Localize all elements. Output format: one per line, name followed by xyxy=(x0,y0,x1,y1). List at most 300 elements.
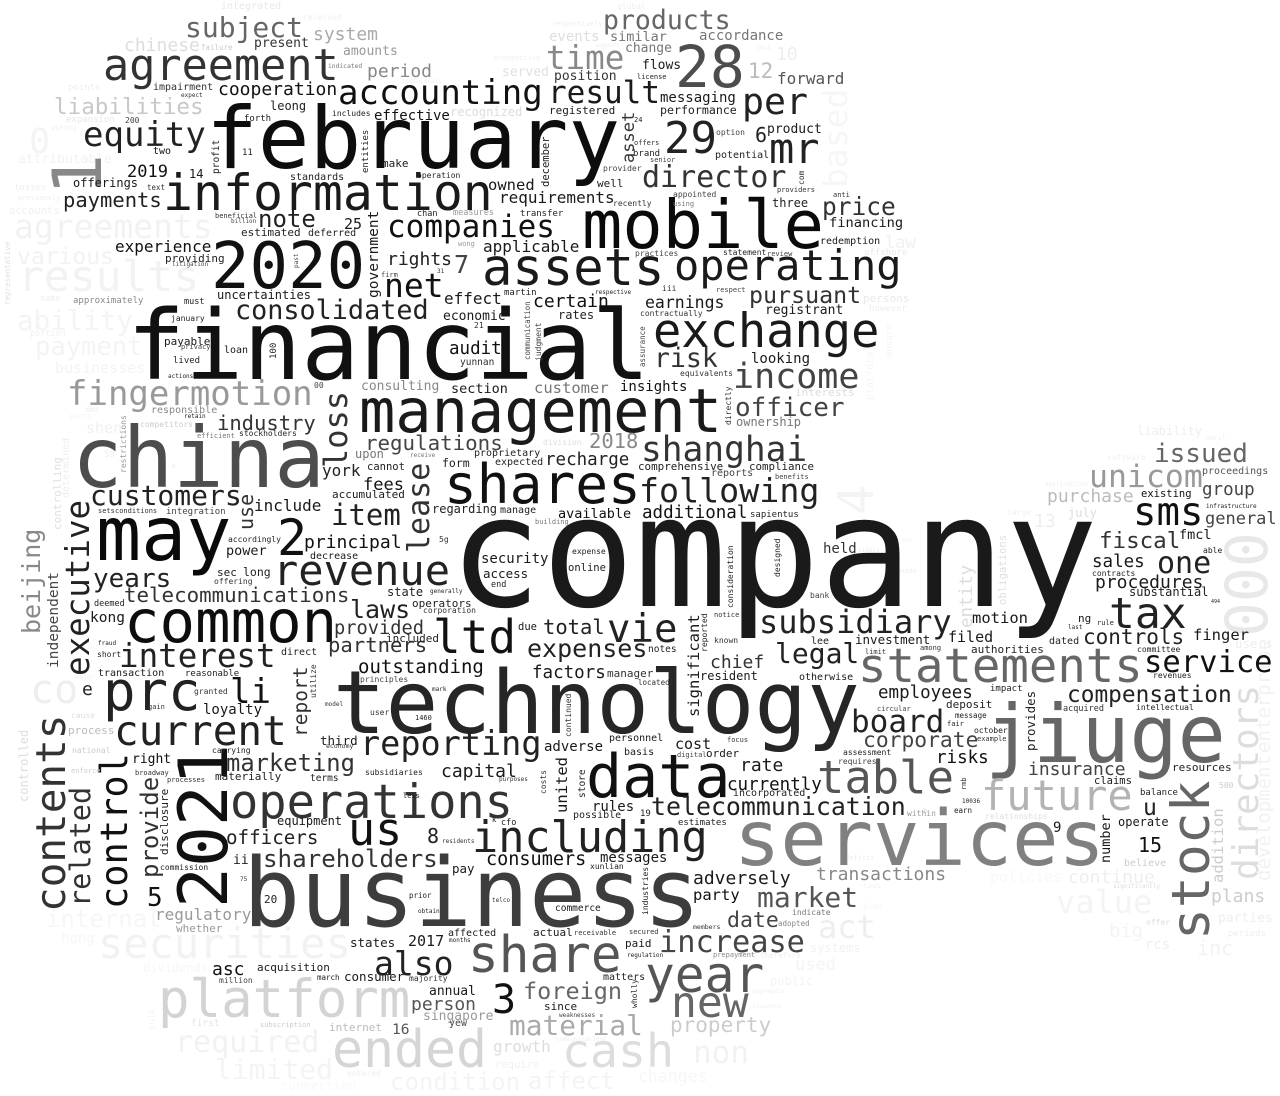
medium words: sms xyxy=(1133,490,1203,535)
vertical words: profit xyxy=(211,140,222,174)
medium words: chief xyxy=(710,652,764,673)
small words: million xyxy=(219,976,253,985)
small words: reasonable xyxy=(185,669,239,679)
faint vertical words: controlled xyxy=(17,730,31,802)
small words: operation xyxy=(417,171,461,180)
small words: purchase xyxy=(1047,486,1134,507)
small words: operate xyxy=(1118,815,1169,829)
small words: located xyxy=(638,678,670,687)
small words: upon xyxy=(355,447,384,461)
word: may: may xyxy=(96,490,231,578)
faint background words: recognized xyxy=(450,105,522,119)
small words: estimated xyxy=(241,226,301,239)
vertical words: consideration xyxy=(726,545,735,608)
faint background words: public xyxy=(770,974,813,988)
faint background words: policies xyxy=(990,868,1062,886)
small words: message xyxy=(955,711,987,720)
small words: 00 xyxy=(314,381,324,390)
small words: 200 xyxy=(125,116,140,125)
small words: transaction xyxy=(98,668,164,679)
small words: singapore xyxy=(423,1009,494,1024)
word: statements: statements xyxy=(858,639,1143,694)
small words: equivalents xyxy=(680,369,733,378)
small words: terms xyxy=(310,773,339,784)
small words: motion xyxy=(972,609,1028,627)
small words: respect xyxy=(716,286,746,294)
medium words: 29 xyxy=(664,113,717,164)
small words: fair xyxy=(947,720,964,728)
small words: present xyxy=(254,36,309,51)
faint background words: dividends xyxy=(143,961,208,975)
word: jiuge: jiuge xyxy=(985,688,1226,781)
small words: long xyxy=(243,565,271,579)
small words: redemption xyxy=(820,236,880,247)
faint background words: events xyxy=(549,29,600,45)
word: including: including xyxy=(472,813,708,863)
medium words: officer xyxy=(735,393,845,423)
medium words: u xyxy=(1143,795,1157,821)
small words: third xyxy=(320,733,358,748)
small words: group xyxy=(1202,480,1255,500)
small words: january xyxy=(171,314,205,323)
small words: efficient xyxy=(197,432,235,440)
small words: 500 xyxy=(1219,781,1234,790)
medium words: time xyxy=(546,39,624,77)
small words: yew xyxy=(449,1018,468,1029)
small words: pay xyxy=(452,861,475,876)
small words: requires xyxy=(838,757,877,766)
small words: indicate xyxy=(792,908,831,917)
word: contents: contents xyxy=(27,715,75,912)
medium words: corporate xyxy=(863,728,978,753)
small words: gain xyxy=(148,703,165,711)
small words: factors xyxy=(532,663,606,683)
small words: asc xyxy=(212,959,245,980)
faint background words: chinese xyxy=(124,35,200,56)
vertical words: 100 xyxy=(269,343,279,359)
faint background words: 10 xyxy=(776,44,798,65)
word: data: data xyxy=(586,742,730,812)
small words: insights xyxy=(620,379,687,395)
medium words: fiscal xyxy=(1099,528,1180,554)
small words: national xyxy=(72,746,111,755)
small words: benefits xyxy=(775,473,809,481)
small words: lee xyxy=(811,636,829,647)
faint vertical words: controlling xyxy=(51,457,64,530)
small words: adverse xyxy=(544,739,603,755)
small words: compliance xyxy=(749,460,814,473)
word: company: company xyxy=(449,464,1098,643)
medium words: new xyxy=(671,978,749,1028)
small words: 24 xyxy=(634,116,642,124)
small words: well xyxy=(597,177,624,190)
small words: fmcl xyxy=(1179,527,1212,543)
medium words: shanghai xyxy=(641,430,807,470)
small words: manager xyxy=(607,667,654,680)
faint background words: significantly xyxy=(1113,883,1160,890)
medium words: net xyxy=(384,266,444,305)
small words: broadway xyxy=(135,769,169,777)
small words: deposit xyxy=(946,698,992,711)
small words: 2019 xyxy=(127,162,168,182)
small words: rates xyxy=(558,308,594,322)
small words: fraud xyxy=(98,640,116,647)
word: february: february xyxy=(206,89,620,189)
small words: substantial xyxy=(1129,585,1208,599)
small words: july xyxy=(1068,506,1097,520)
small words: authorities xyxy=(971,643,1044,656)
vertical words: united xyxy=(553,757,571,813)
small words: included xyxy=(386,632,439,645)
word: information: information xyxy=(163,164,493,222)
faint background words: liability xyxy=(1137,424,1202,438)
faint background words: name xyxy=(40,294,60,304)
faint background words: first xyxy=(191,1018,220,1029)
medium words: foreign xyxy=(523,977,622,1005)
small words: power xyxy=(226,543,267,559)
small words: circular xyxy=(877,705,911,713)
small words: acquired xyxy=(1063,704,1104,714)
medium words: one xyxy=(1157,546,1211,581)
faint vertical words: ensure xyxy=(885,324,895,357)
medium words: reporting xyxy=(360,724,542,763)
small words: conditions xyxy=(115,507,157,515)
medium words: li xyxy=(230,672,271,712)
medium words: system xyxy=(313,24,378,45)
small words: comprehensive xyxy=(638,460,723,473)
small words: product xyxy=(767,122,822,137)
word: operations: operations xyxy=(230,775,513,830)
small words: owned xyxy=(488,176,535,194)
small words: providers xyxy=(777,186,815,194)
small words: sapientus xyxy=(750,510,799,520)
word: 1: 1 xyxy=(39,154,118,195)
small words: prior xyxy=(409,891,432,900)
small words: months xyxy=(449,937,471,944)
faint background words: changes xyxy=(638,1067,708,1086)
faint background words: 0 xyxy=(29,122,50,162)
small words: billion xyxy=(231,218,257,225)
faint background words: prospective xyxy=(494,54,540,62)
small words: sales xyxy=(1092,552,1145,572)
small words: earn xyxy=(954,806,972,815)
medium words: income xyxy=(733,357,859,397)
small words: whether xyxy=(176,922,223,935)
vertical words: related xyxy=(64,787,97,907)
medium words: controls xyxy=(1083,625,1184,649)
small words: integration xyxy=(166,507,226,517)
small words: competitors xyxy=(140,420,193,429)
medium words: director xyxy=(642,160,786,195)
small words: affected xyxy=(448,928,496,939)
small words: transfer xyxy=(520,209,564,219)
vertical words: number xyxy=(1098,814,1114,863)
vertical words: lease xyxy=(402,463,437,553)
small words: 14 xyxy=(189,167,203,181)
faint background words: previously xyxy=(18,194,60,202)
small words: last xyxy=(1068,624,1083,631)
small words: available xyxy=(558,506,631,522)
vertical words: executive xyxy=(59,500,97,676)
small words: principles xyxy=(360,675,408,684)
small words: 25 xyxy=(344,215,362,233)
small words: offering xyxy=(214,577,253,586)
word: stock: stock xyxy=(1161,780,1222,940)
faint background words: attributable xyxy=(18,152,112,167)
word: mobile: mobile xyxy=(582,186,824,264)
small words: loyalty xyxy=(203,702,262,718)
small words: direct xyxy=(281,647,317,658)
medium words: officers xyxy=(226,826,318,849)
small words: three xyxy=(772,196,808,210)
medium words: 7 xyxy=(454,250,469,279)
medium words: issued xyxy=(1154,439,1248,469)
small words: senior xyxy=(650,156,675,164)
faint background words: b xyxy=(923,807,927,815)
medium words: note xyxy=(258,205,316,233)
small words: proceedings xyxy=(1202,466,1268,477)
small words: generally xyxy=(430,588,463,595)
faint vertical words: obligations xyxy=(997,535,1009,605)
small words: personnel xyxy=(609,733,663,744)
small words: members xyxy=(693,923,720,931)
small words: xunlian xyxy=(590,862,624,871)
faint background words: rcs xyxy=(1145,937,1170,953)
small words: 2017 xyxy=(408,932,444,950)
small words: expected xyxy=(495,457,543,468)
faint background words: ability xyxy=(17,305,133,337)
vertical words: asset xyxy=(619,112,639,163)
small words: performance xyxy=(660,103,737,117)
small words: revenues xyxy=(1153,671,1192,680)
small words: carrying xyxy=(212,746,251,755)
word: services: services xyxy=(734,795,1105,884)
medium words: also xyxy=(374,944,453,983)
small words: payable xyxy=(164,335,210,348)
small words: effect xyxy=(444,289,502,308)
vertical words: provides xyxy=(1023,691,1038,751)
small words: period xyxy=(367,61,432,82)
medium words: subject xyxy=(185,11,303,44)
faint background words: mms xyxy=(85,405,100,414)
faint background words: individuals xyxy=(402,78,442,85)
faint vertical words: platforms xyxy=(865,346,876,400)
faint vertical words: based xyxy=(816,89,855,188)
faint background words: 2014 xyxy=(756,45,771,52)
small words: employees xyxy=(878,683,973,703)
word: management: management xyxy=(359,377,722,447)
faint background words: payment xyxy=(35,332,142,362)
word: operating: operating xyxy=(674,241,902,290)
small words: 10036 xyxy=(962,798,980,805)
vertical words: entities xyxy=(361,130,371,173)
faint background words: major xyxy=(76,674,94,681)
faint background words: required xyxy=(175,1025,320,1060)
word: 2020: 2020 xyxy=(211,230,365,304)
medium words: consolidated xyxy=(235,295,429,326)
faint background words: parties xyxy=(1218,911,1273,926)
vertical words: past xyxy=(293,253,300,268)
small words: internet xyxy=(329,1021,382,1034)
small words: since xyxy=(544,1000,577,1013)
small words: able xyxy=(1203,546,1222,555)
small words: capital xyxy=(441,761,517,782)
small words: k xyxy=(492,816,497,824)
small words: process xyxy=(68,724,114,737)
faint background words: portion xyxy=(30,329,66,339)
small words: standards xyxy=(290,172,344,183)
small words: decrease xyxy=(310,551,358,562)
small words: resources xyxy=(1172,761,1232,774)
faint background words: plan xyxy=(863,902,882,911)
small words: 1460 xyxy=(415,714,432,722)
vertical words: provide xyxy=(136,777,164,878)
medium words: expenses xyxy=(527,634,647,663)
small words: consumers xyxy=(486,849,586,870)
vertical words: use xyxy=(234,494,258,530)
faint vertical words: enterprise xyxy=(1253,639,1275,753)
small words: leong xyxy=(270,99,306,113)
small words: forth xyxy=(244,114,271,124)
small words: investment xyxy=(855,632,930,647)
faint background words: non xyxy=(693,1035,749,1071)
small words: principal xyxy=(304,532,402,553)
small words: digital xyxy=(677,751,707,759)
small words: 494 xyxy=(1211,599,1220,605)
faint background words: received xyxy=(303,13,342,22)
small words: purposes xyxy=(499,776,528,783)
word: share: share xyxy=(468,926,622,985)
small words: balance xyxy=(1140,788,1178,798)
small words: measures xyxy=(453,208,494,218)
small words: transactions xyxy=(816,864,946,885)
small words: growth xyxy=(493,1037,551,1056)
faint background words: connection xyxy=(281,1078,356,1093)
medium words: provided xyxy=(334,618,424,639)
small words: cost xyxy=(675,735,711,753)
word: 28: 28 xyxy=(675,33,745,101)
small words: existing xyxy=(1141,488,1192,500)
small words: believe xyxy=(1124,858,1166,869)
small words: license xyxy=(637,73,667,81)
small words: rule xyxy=(1097,619,1114,627)
small words: matters xyxy=(603,972,645,983)
medium words: telecommunication xyxy=(651,792,906,821)
small words: obtain xyxy=(418,908,440,915)
small words: actual xyxy=(533,926,573,939)
small words: retain xyxy=(184,413,206,420)
medium words: subsidiary xyxy=(759,603,952,641)
small words: infrastructure xyxy=(1206,503,1257,510)
small words: anti xyxy=(833,191,850,199)
small words: weaknesses xyxy=(559,1012,596,1019)
small words: ii xyxy=(233,853,249,868)
faint background words: businesses xyxy=(55,359,145,377)
medium words: mr xyxy=(769,124,820,173)
faint background words: global xyxy=(617,2,646,11)
small words: states xyxy=(350,935,395,950)
small words: access xyxy=(483,566,528,581)
faint background words: large xyxy=(1007,508,1031,517)
faint background words: entered xyxy=(347,1069,381,1078)
small words: subscription xyxy=(260,1021,311,1029)
small words: 8 xyxy=(427,824,439,848)
small words: beneficial xyxy=(215,212,257,220)
small words: party xyxy=(693,886,740,904)
small words: cfo xyxy=(501,818,516,828)
vertical words: communication xyxy=(523,301,532,360)
small words: two xyxy=(153,146,171,157)
vertical words: assurance xyxy=(638,326,647,367)
faint background words: funds xyxy=(863,883,881,890)
vertical words: reported xyxy=(700,613,709,652)
small words: expense xyxy=(572,547,606,556)
medium words: rights xyxy=(387,249,452,270)
small words: model xyxy=(325,701,343,708)
small words: end xyxy=(491,580,506,590)
small words: accordingly xyxy=(228,535,281,544)
faint background words: coo xyxy=(902,537,913,544)
medium words: fingermotion xyxy=(67,374,313,414)
medium words: unicom xyxy=(1089,459,1203,495)
small words: resident xyxy=(700,669,758,683)
small words: privacy xyxy=(181,343,211,351)
faint vertical words: entity xyxy=(957,565,977,628)
small words: expect xyxy=(181,92,203,99)
medium words: per xyxy=(742,80,808,123)
medium words: board xyxy=(851,704,944,740)
small words: reports xyxy=(711,468,753,479)
vertical words: directly xyxy=(724,386,733,425)
faint background words: internal xyxy=(46,905,162,933)
small words: 11 xyxy=(242,148,253,158)
small words: regulation xyxy=(627,952,664,959)
faint background words: inc xyxy=(1197,936,1233,960)
small words: mark xyxy=(432,686,447,693)
small words: amounts xyxy=(343,44,398,59)
word: future: future xyxy=(981,771,1133,820)
small words: receivable xyxy=(574,929,616,937)
word: 2021: 2021 xyxy=(165,744,244,908)
faint background words: offshore xyxy=(864,248,907,258)
small words: possible xyxy=(573,810,621,821)
vertical words xyxy=(17,112,1114,1008)
small words: assessment xyxy=(843,748,891,757)
faint background words: periods xyxy=(1228,929,1266,939)
small words: intellectual xyxy=(1136,703,1194,712)
vertical words: industries xyxy=(641,867,650,915)
faint background words: support xyxy=(595,42,621,49)
faint background words: law xyxy=(885,233,916,253)
vertical words: restrictions xyxy=(119,415,128,473)
faint background words: cause xyxy=(71,711,95,720)
small words: lived xyxy=(173,356,200,366)
small words: chan xyxy=(417,209,437,219)
medium words: telecommunications xyxy=(124,583,349,607)
word: tax: tax xyxy=(1109,589,1187,639)
faint background words: issuance xyxy=(752,1003,781,1010)
small words: wong xyxy=(458,240,475,248)
small words: march xyxy=(317,973,340,982)
small words: consulting xyxy=(361,379,439,394)
small words: impact xyxy=(990,684,1023,694)
small words: text xyxy=(147,183,165,192)
faint background words: aggregate xyxy=(752,988,785,995)
faint background words: systems xyxy=(810,941,861,955)
small words: approximately xyxy=(73,296,144,306)
faint background words: accounts xyxy=(9,205,60,217)
small words: october xyxy=(974,726,1008,735)
